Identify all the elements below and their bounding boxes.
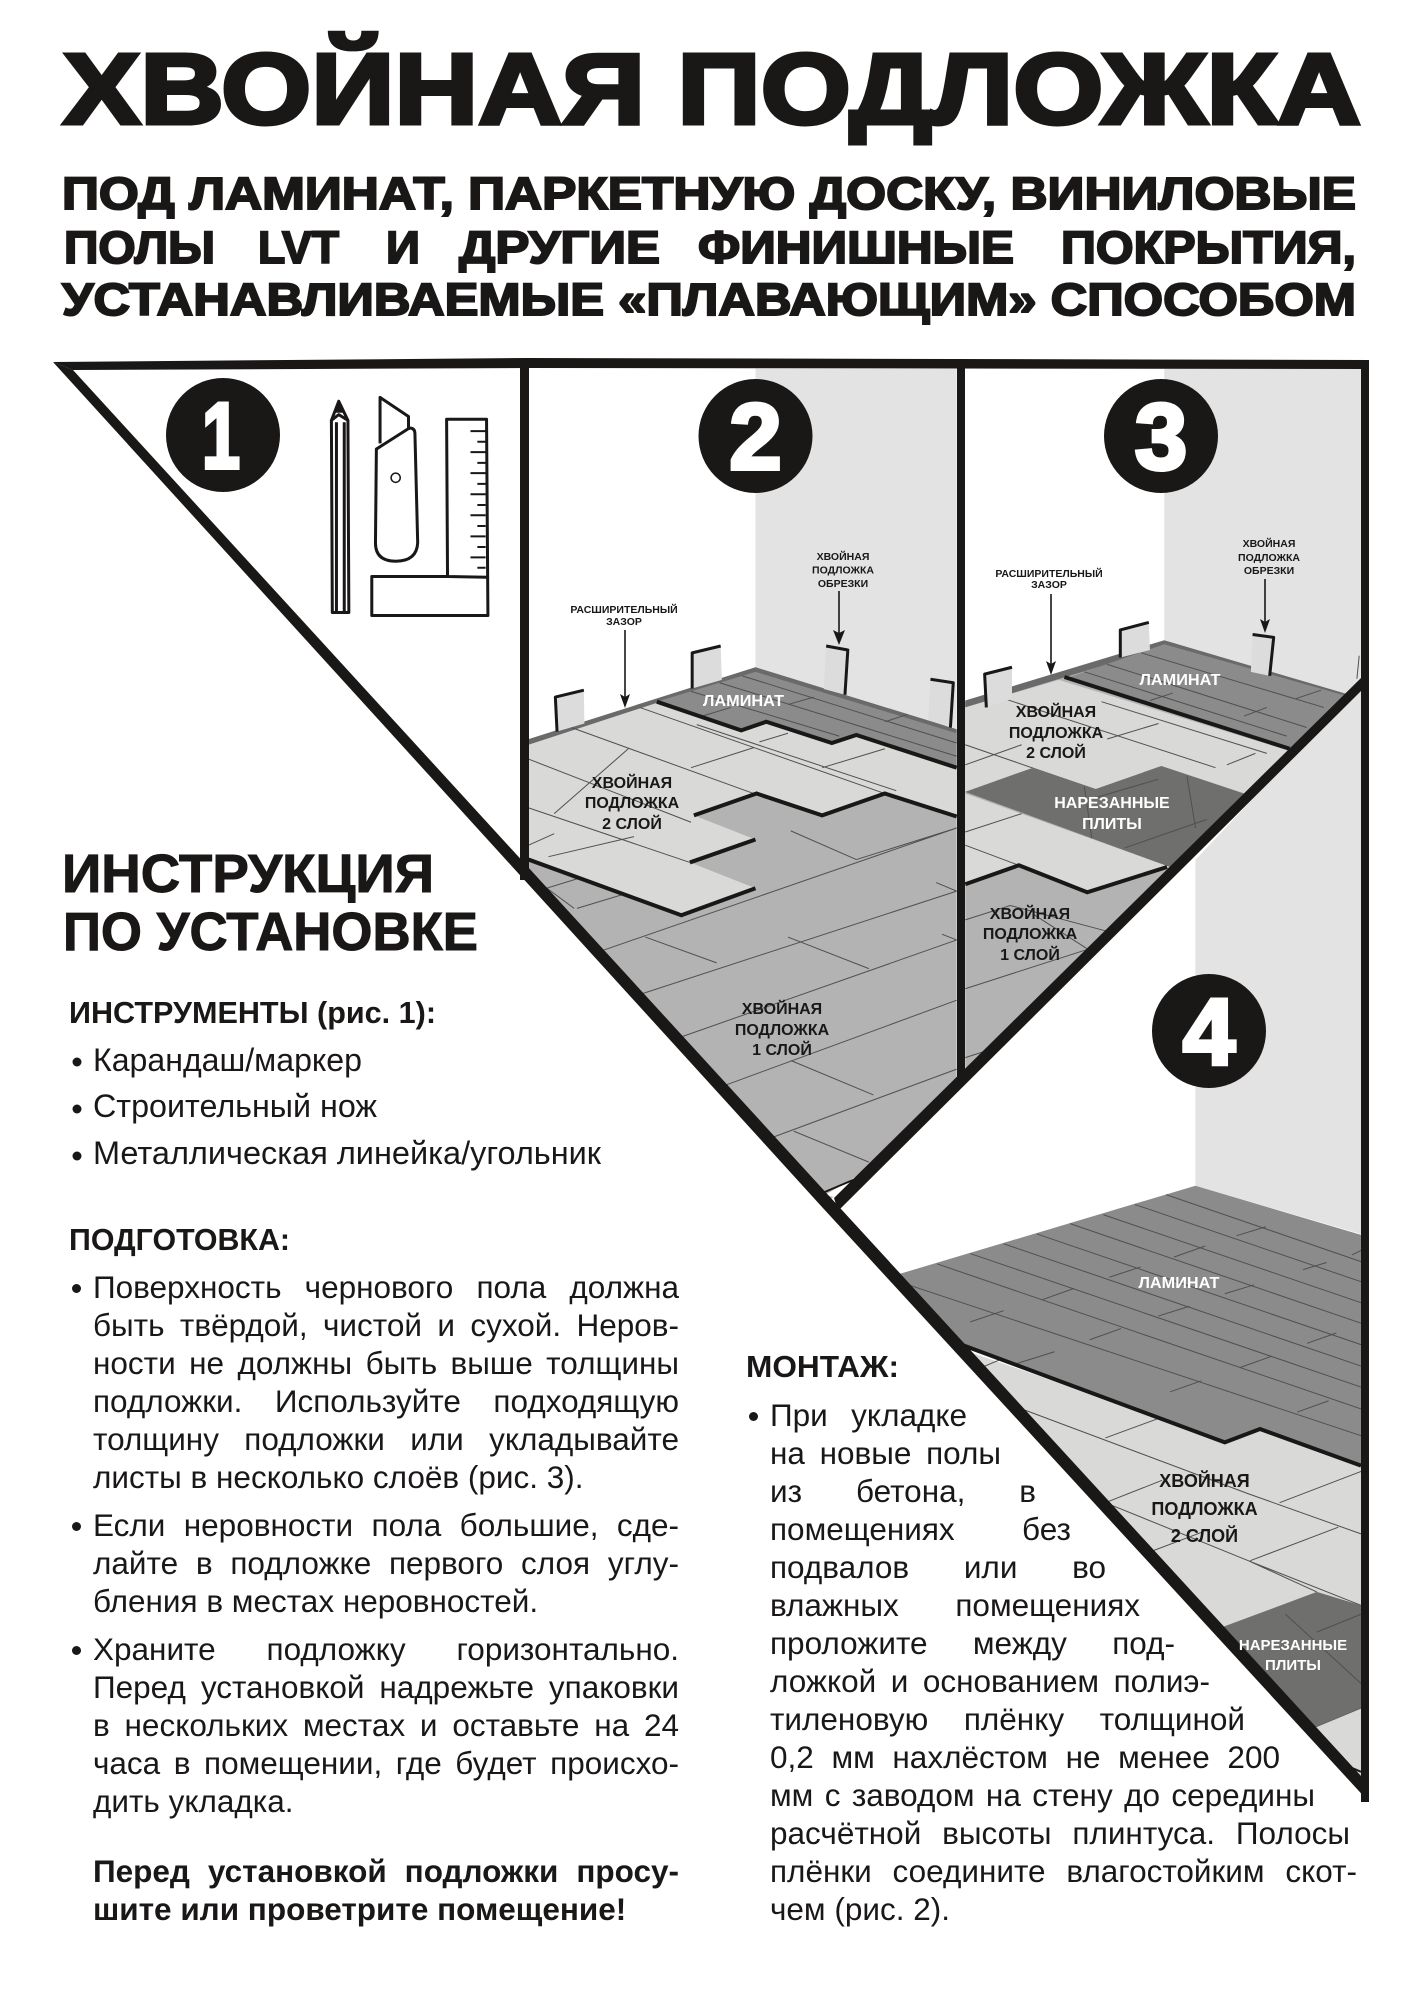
- arrow: offcuts, fig 3: [1260, 579, 1270, 633]
- label: expansion gap, fig 3: РАСШИРИТЕЛЬНЫЙ: [995, 567, 1103, 580]
- label: offcuts, fig 3: ПОДЛОЖКА: [1238, 552, 1300, 564]
- label: layer 2, fig 3: ХВОЙНАЯ: [1016, 702, 1096, 721]
- paragraph: storage: Храните подложку горизонтально.: [93, 1631, 679, 1667]
- subtitle: ДРУГИЕ: [459, 222, 660, 273]
- panel 2: room with first and second underlay layers: [520, 369, 957, 1207]
- subtitle: УСТАНАВЛИВАЕМЫЕ «ПЛАВАЮЩИМ» СПОСОБОМ: [62, 274, 1356, 325]
- paragraph: subfloor surface: Поверхность чернового пола должна: [93, 1269, 679, 1305]
- label: layer 2, fig 4: 2 СЛОЙ: [1171, 1525, 1238, 1546]
- label: expansion gap, fig 2: [570, 603, 678, 628]
- step 4 number: 4: [1183, 979, 1235, 1084]
- label: layer 2, fig 3: ПОДЛОЖКА: [1009, 725, 1104, 742]
- label: layer 2, fig 3: [1009, 702, 1104, 762]
- label: cut plates, fig 3: [1054, 795, 1170, 833]
- label: cut plates, fig 3: НАРЕЗАННЫЕ: [1054, 795, 1170, 812]
- label: layer 2, fig 4: ХВОЙНАЯ: [1159, 1470, 1250, 1491]
- label: offcuts, fig 2: ПОДЛОЖКА: [812, 564, 874, 576]
- label: expansion gap, fig 3: [995, 567, 1103, 591]
- label: cut plates, fig 4: НАРЕЗАННЫЕ: [1239, 1637, 1347, 1654]
- label: laminate, fig 4: ЛАМИНАТ: [1138, 1275, 1220, 1292]
- paragraph: storage: в нескольких местах и оставьте на 24: [93, 1707, 679, 1743]
- label: layer 1, fig 3: ПОДЛОЖКА: [983, 926, 1078, 943]
- paragraph: mounting: подвалов или во: [770, 1549, 1106, 1585]
- icon: pencil: [331, 401, 349, 612]
- paragraph: subfloor surface: подложки. Используйте подходящую: [93, 1383, 679, 1419]
- layer 2 lower sheets: [965, 794, 1170, 892]
- wall spacers: [985, 622, 1359, 707]
- cut plates: [1221, 1592, 1361, 1728]
- heading: installation instructions: ИНСТРУКЦИЯ: [62, 844, 434, 904]
- arrow: offcuts, fig 2: [833, 591, 845, 645]
- label: layer 2, fig 3: 2 СЛОЙ: [1026, 743, 1086, 762]
- paragraph: subfloor surface: [72, 1269, 679, 1495]
- paragraph: bold warning: Перед установкой подложки просу-: [93, 1853, 679, 1889]
- label: layer 1, fig 2: [735, 999, 830, 1059]
- paragraph: mounting: [749, 1397, 1357, 1927]
- paragraph: floor unevenness: лайте в подложке первого слоя углу-: [93, 1545, 679, 1581]
- paragraph: subfloor surface: быть твёрдой, чистой и сухой. Неров-: [93, 1307, 679, 1343]
- label: cut plates, fig 3: ПЛИТЫ: [1082, 816, 1142, 833]
- paragraph: mounting: мм с заводом на стену до середины: [770, 1777, 1315, 1813]
- label: expansion gap, fig 3: ЗАЗОР: [1031, 579, 1067, 591]
- label: layer 1, fig 2: ХВОЙНАЯ: [742, 999, 822, 1018]
- paragraph: subfloor surface: толщину подложки или укладывайте: [93, 1421, 679, 1457]
- label: layer 2, fig 2: ПОДЛОЖКА: [585, 795, 680, 812]
- label: layer 1, fig 3: 1 СЛОЙ: [1000, 945, 1060, 964]
- label: cut plates, fig 4: ПЛИТЫ: [1265, 1657, 1321, 1674]
- paragraph: mounting: влажных помещениях: [770, 1587, 1140, 1623]
- icon: carpenter square: [372, 419, 488, 616]
- label: offcuts, fig 3: [1238, 537, 1300, 577]
- paragraph: mounting: При укладке: [770, 1397, 967, 1433]
- step 4 number: [1152, 974, 1266, 1088]
- heading: tools: ИНСТРУМЕНТЫ (рис. 1):: [69, 995, 436, 1030]
- label: offcuts, fig 2: ОБРЕЗКИ: [818, 578, 868, 590]
- paragraph: mounting: проложите между под-: [770, 1625, 1175, 1661]
- icon: utility knife: [375, 397, 418, 561]
- arrow: expansion gap, fig 2: [620, 630, 630, 708]
- paragraph: storage: часа в помещении, где будет происхо-: [93, 1745, 679, 1781]
- step 2 number: 2: [729, 384, 782, 489]
- label: layer 1, fig 2: 1 СЛОЙ: [752, 1040, 812, 1059]
- title: ХВОЙНАЯ ПОДЛОЖКА: [63, 32, 1361, 146]
- subtitle: ПОКРЫТИЯ,: [1061, 222, 1356, 273]
- paragraph: floor unevenness: бления в местах неровностей.: [93, 1583, 538, 1619]
- paragraph: storage: Перед установкой надрежьте упаковки: [93, 1669, 679, 1705]
- step 2 number: [698, 379, 812, 493]
- paragraph: mounting: плёнки соедините влагостойким скот-: [770, 1853, 1357, 1889]
- label: expansion gap, fig 2: ЗАЗОР: [606, 616, 642, 628]
- label: layer 1, fig 3: [983, 904, 1078, 964]
- panel 3: room with cut plates: [965, 369, 1361, 1081]
- layer 2 upper sheets: [965, 680, 1290, 794]
- heading: installation instructions: ПО УСТАНОВКЕ: [63, 902, 478, 962]
- tools list: Металлическая линейка/угольник: [93, 1135, 602, 1171]
- heading: mounting: МОНТАЖ:: [746, 1349, 899, 1384]
- label: expansion gap, fig 2: РАСШИРИТЕЛЬНЫЙ: [570, 603, 678, 616]
- subtitle: ПОЛЫ: [64, 222, 215, 273]
- paragraph: mounting: чем (рис. 2).: [770, 1891, 950, 1927]
- label: cut plates, fig 4: [1239, 1637, 1347, 1674]
- subtitle: ФИНИШНЫЕ: [698, 222, 1014, 273]
- paragraph: storage: [72, 1631, 679, 1819]
- heading: installation instructions: [62, 844, 478, 962]
- tools list: [72, 1042, 602, 1171]
- label: layer 2, fig 2: 2 СЛОЙ: [602, 814, 662, 833]
- step 3 number: 3: [1135, 384, 1187, 489]
- panel 4: finished floor: [896, 681, 1364, 1786]
- paragraph: mounting: из бетона, в: [770, 1473, 1036, 1509]
- layer 2 sheets: [529, 703, 957, 915]
- label: offcuts, fig 2: ХВОЙНАЯ: [817, 550, 869, 563]
- paragraph: bold warning: [93, 1853, 679, 1927]
- paragraph: mounting: помещениях без: [770, 1511, 1071, 1547]
- paragraph: mounting: на новые полы: [770, 1435, 1001, 1471]
- laminate strip: [1064, 644, 1347, 749]
- step 1 number: [166, 378, 280, 492]
- label: layer 1, fig 2: ПОДЛОЖКА: [735, 1022, 830, 1039]
- paragraph: mounting: ложкой и основанием полиэ-: [770, 1663, 1210, 1699]
- laminate strip: [657, 672, 957, 768]
- paragraph: mounting: расчётной высоты плинтуса. Полосы: [770, 1815, 1350, 1851]
- paragraph: storage: дить укладка.: [93, 1783, 293, 1819]
- laminate: [896, 1186, 1361, 1466]
- paragraph: mounting: тиленовую плёнку толщиной: [770, 1701, 1245, 1737]
- label: layer 2, fig 2: ХВОЙНАЯ: [592, 773, 672, 792]
- heading: preparation: ПОДГОТОВКА:: [69, 1222, 290, 1257]
- label: offcuts, fig 3: ОБРЕЗКИ: [1244, 565, 1294, 577]
- label: offcuts, fig 3: ХВОЙНАЯ: [1243, 537, 1295, 550]
- step 1 number: 1: [202, 383, 240, 488]
- label: layer 2, fig 4: [1151, 1470, 1258, 1546]
- subtitle: ПОД ЛАМИНАТ, ПАРКЕТНУЮ ДОСКУ, ВИНИЛОВЫЕ: [62, 168, 1356, 219]
- arrow: expansion gap, fig 3: [1046, 594, 1056, 675]
- paragraph: floor unevenness: [72, 1507, 679, 1619]
- paragraph: subfloor surface: листы в несколько слоёв (рис. 3).: [93, 1459, 583, 1495]
- tools list: Карандаш/маркер: [93, 1042, 362, 1078]
- subtitle: LVT: [258, 222, 339, 273]
- wall spacers: [555, 646, 953, 732]
- label: layer 2, fig 4: ПОДЛОЖКА: [1151, 1499, 1258, 1519]
- tools list: Строительный нож: [93, 1088, 378, 1124]
- label: laminate, fig 3: ЛАМИНАТ: [1140, 672, 1221, 689]
- label: offcuts, fig 2: [812, 550, 874, 590]
- label: layer 1, fig 3: ХВОЙНАЯ: [990, 904, 1070, 923]
- paragraph: mounting: 0,2 мм нахлёстом не менее 200: [770, 1739, 1280, 1775]
- paragraph: bold warning: шите или проветрите помещение!: [93, 1891, 626, 1927]
- subtitle: И: [386, 222, 420, 273]
- label: laminate, fig 2: ЛАМИНАТ: [703, 693, 784, 710]
- label: layer 2, fig 2: [585, 773, 680, 833]
- subtitle: [62, 168, 1356, 325]
- frame lines: [53, 358, 1369, 1802]
- step 3 number: [1104, 379, 1218, 493]
- cut plates: [965, 766, 1244, 867]
- paragraph: floor unevenness: Если неровности пола большие, сде-: [93, 1507, 679, 1543]
- paragraph: subfloor surface: ности не должны быть выше толщины: [93, 1345, 679, 1381]
